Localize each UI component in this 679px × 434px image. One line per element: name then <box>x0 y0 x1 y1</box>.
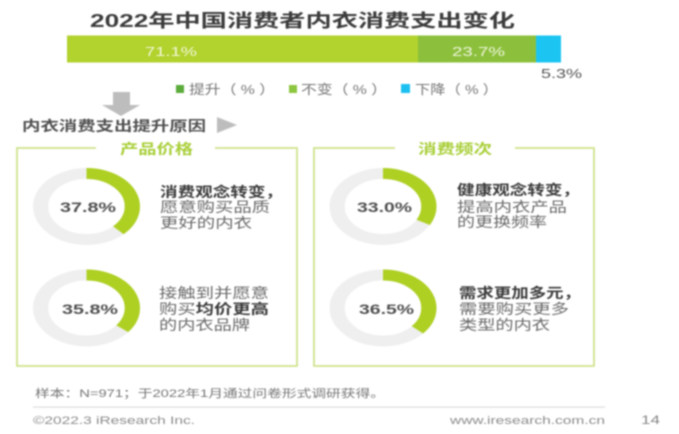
text: changing health concept: 健康观念转变， <box>457 182 580 198</box>
text: changing consumption concept: 消费观念转变， <box>160 184 283 200</box>
title: 2022年中国消费者内衣消费支出变化 <box>90 10 515 31</box>
stacked bar chart: 71.1% <box>145 44 198 59</box>
stacked bar chart: 5.3% <box>541 66 583 81</box>
text: higher average price brands: 的内衣品牌 <box>159 317 250 333</box>
text: more diverse needs: 需要购买更多 <box>459 301 569 317</box>
icon: right arrow <box>217 117 237 133</box>
donut: 36.5%: 36.5% <box>359 301 415 317</box>
panel: consumption frequency <box>314 141 594 366</box>
text: higher average price brands <box>159 285 269 333</box>
legend: 不变（ % ） <box>301 82 387 97</box>
text: more diverse needs <box>459 285 581 333</box>
copyright: ©2022.3 iResearch Inc. <box>33 415 195 427</box>
text: changing health concept <box>457 182 580 230</box>
sample note: 样本：N=971；于2022年1月通过问卷形式调研获得。 <box>35 386 385 400</box>
donut: 37.8% <box>41 174 132 240</box>
panel heading: consumption frequency: 消费频次 <box>418 141 492 157</box>
text: more diverse needs: 需求更加多元， <box>459 285 581 301</box>
donut: 36.5% <box>337 275 429 341</box>
subtitle: 内衣消费支出提升原因 <box>22 118 206 134</box>
text: higher average price brands: 购买 均价更高 <box>159 301 269 317</box>
text: higher average price brands: 接触到并愿意 <box>159 285 269 301</box>
icon: down arrow <box>102 92 140 116</box>
panel: product price <box>17 141 297 366</box>
legend <box>176 82 498 97</box>
donut: 35.8%: 35.8% <box>62 301 119 317</box>
panel heading: product price: 产品价格 <box>120 141 193 157</box>
text: changing health concept: 提高内衣产品 <box>457 199 567 215</box>
donut: 37.8%: 37.8% <box>60 199 117 215</box>
donut: 33.0% <box>337 174 429 240</box>
legend: 提升（ % ） <box>189 82 275 97</box>
legend: 下降（ % ） <box>415 82 498 97</box>
text: changing health concept: 的更换频率 <box>457 214 547 230</box>
text: changing consumption concept: 愿意购买品质 <box>160 199 270 215</box>
donut: 35.8% <box>41 275 132 341</box>
text: changing consumption concept: 更好的内衣 <box>160 215 252 231</box>
text: changing consumption concept <box>160 184 283 231</box>
stacked bar chart: 23.7% <box>452 44 506 59</box>
stacked bar chart <box>67 36 583 81</box>
website: www.iresearch.com.cn <box>449 415 605 427</box>
page number: 14 <box>641 413 660 427</box>
donut: 33.0%: 33.0% <box>357 199 413 215</box>
text: more diverse needs: 类型的内衣 <box>459 317 550 333</box>
